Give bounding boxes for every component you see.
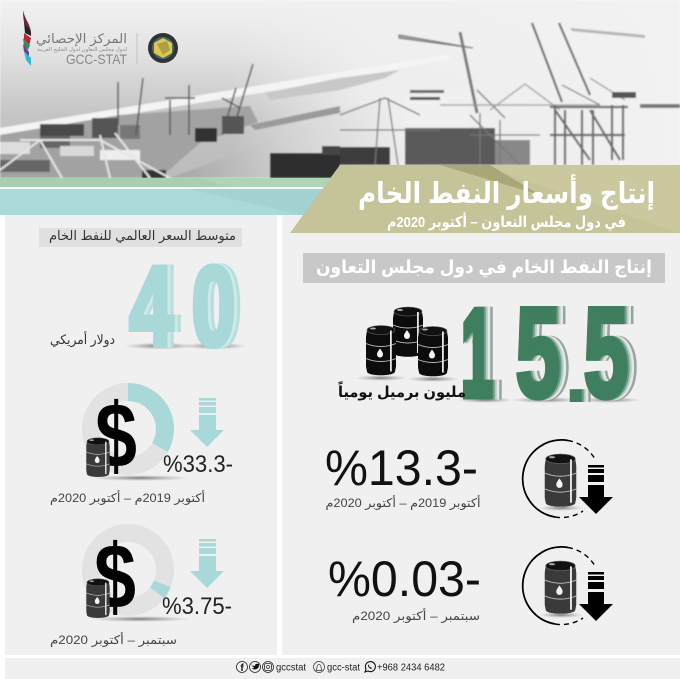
footer contact bar: gcc-stat	[327, 662, 360, 674]
donut: year on year price: $	[95, 385, 137, 487]
icon: three oil barrels	[355, 307, 459, 382]
big number 15.5: .	[564, 326, 588, 421]
big number 15.5: 1	[461, 286, 493, 423]
value: -0.03%: %0.03-	[328, 551, 481, 607]
logo: GCC-STAT	[23, 10, 178, 67]
icon: facebook	[236, 662, 248, 674]
icon: whatsapp	[365, 662, 375, 672]
donut: month on month price	[86, 526, 190, 628]
value: -33.3%: %33.3-	[163, 451, 233, 478]
port photo header	[0, 0, 680, 178]
logo: GCC-STAT: المركز الإحصائي	[36, 31, 127, 47]
icon: twitter	[250, 662, 260, 672]
GCC emblem	[148, 33, 178, 63]
panel: GCC crude production	[282, 215, 680, 655]
subtitle: في دول مجلس التعاون – أكتوبر 2020م	[387, 212, 626, 231]
value: -3.75%: %3.75-	[162, 593, 232, 620]
caption: Sep to Oct 2020: سبتمبر – أكتوبر 2020م	[50, 632, 177, 648]
caption: Sep to Oct 2020: سبتمبر – أكتوبر 2020م	[352, 608, 480, 624]
big number 40: 4	[129, 244, 173, 369]
icon: instagram	[262, 662, 274, 672]
logo ribbon	[23, 10, 31, 66]
icon: facebook: f	[240, 663, 244, 674]
arrow: teal down 1	[190, 398, 224, 447]
value: -13.3%: %13.3-	[325, 440, 478, 496]
big number 15.5: 5	[516, 281, 560, 425]
donut: month on month price: $	[94, 526, 136, 628]
footer contact bar	[5, 658, 680, 679]
heading: average world price: متوسط السعر العالمي للنفط الخام	[49, 228, 236, 244]
footer contact bar: gccstat	[276, 662, 306, 674]
donut: year on year price	[86, 385, 190, 487]
decorative band	[0, 178, 340, 215]
heading: GCC crude production: إنتاج النفط الخام في دول مجلس التعاون	[316, 257, 652, 278]
icon: barrel decline 1	[523, 440, 613, 518]
caption: Oct 2019 to Oct 2020: أكتوبر 2019م – أكتوبر 2020م	[326, 495, 480, 511]
title banner	[290, 165, 680, 233]
icon: snapchat	[314, 662, 324, 672]
big number 15.5: 5	[584, 281, 628, 425]
label: million barrels per day: مليون برميل يومياً	[338, 381, 466, 401]
logo: GCC-STAT: لدول مجلس التعاون لدول الخليج العربية	[37, 47, 128, 53]
logo: GCC-STAT: GCC-STAT	[66, 51, 127, 67]
caption: Oct 2019 to Oct 2020: أكتوبر 2019م – أكتوبر 2020م	[50, 490, 205, 506]
heading: GCC crude production	[303, 253, 665, 283]
big number 40	[124, 244, 247, 369]
big number 15.5	[457, 281, 640, 425]
label: US dollar: دولار أمريكي	[50, 331, 115, 348]
panel: world crude price	[5, 215, 277, 655]
footer contact bar: +968 2434 6482	[377, 662, 445, 674]
big number 40: 0	[192, 244, 235, 369]
arrow: teal down 2	[190, 539, 224, 588]
icon: barrel decline 2	[523, 547, 613, 625]
